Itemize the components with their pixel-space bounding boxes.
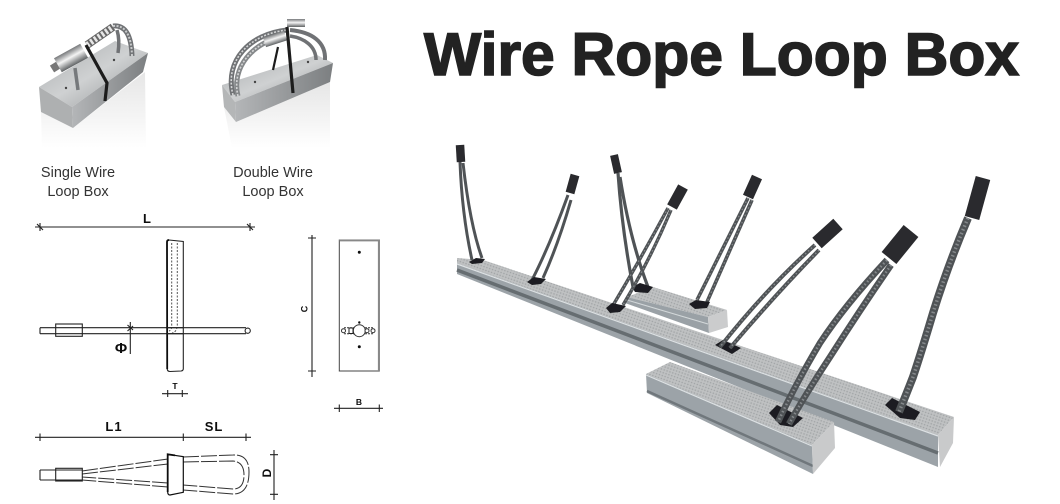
title: Wire Rope Loop Box (424, 21, 1019, 88)
drawing: top view with L1, SL and D dimensions: D (260, 468, 274, 477)
rear short box (625, 287, 728, 333)
front short box (646, 362, 835, 474)
caption: double wire loop box: Double Wire (233, 165, 313, 181)
drawing: side view with C and B dimensions: C (300, 305, 310, 312)
product photo: double wire loop box (222, 19, 333, 148)
front box cable loop (769, 231, 911, 427)
product photo: single wire loop box (39, 26, 148, 148)
drawing: top view with L1, SL and D dimensions: SL (205, 419, 223, 434)
caption: single wire loop box (41, 165, 115, 200)
drawing: side view with C and B dimensions: B (356, 397, 362, 407)
long box (457, 258, 954, 467)
caption: double wire loop box: Loop Box (242, 184, 304, 200)
product photo: wire rope loop boxes in perspective (457, 145, 983, 474)
caption: double wire loop box (233, 165, 313, 200)
drawing: front view with L, phi and T dimensions: L (143, 211, 151, 226)
drawing: front view with L, phi and T dimensions (35, 211, 255, 397)
long box cable loops (460, 145, 983, 420)
drawing: front view with L, phi and T dimensions: T (172, 381, 178, 391)
rear box cable loops (614, 155, 757, 309)
caption: single wire loop box: Single Wire (41, 165, 115, 181)
drawing: top view with L1, SL and D dimensions: L1 (105, 419, 123, 434)
drawing: side view with C and B dimensions (300, 235, 383, 412)
caption: single wire loop box: Loop Box (47, 184, 109, 200)
drawing: top view with L1, SL and D dimensions (35, 419, 278, 500)
drawing: front view with L, phi and T dimensions: Φ (115, 340, 127, 357)
